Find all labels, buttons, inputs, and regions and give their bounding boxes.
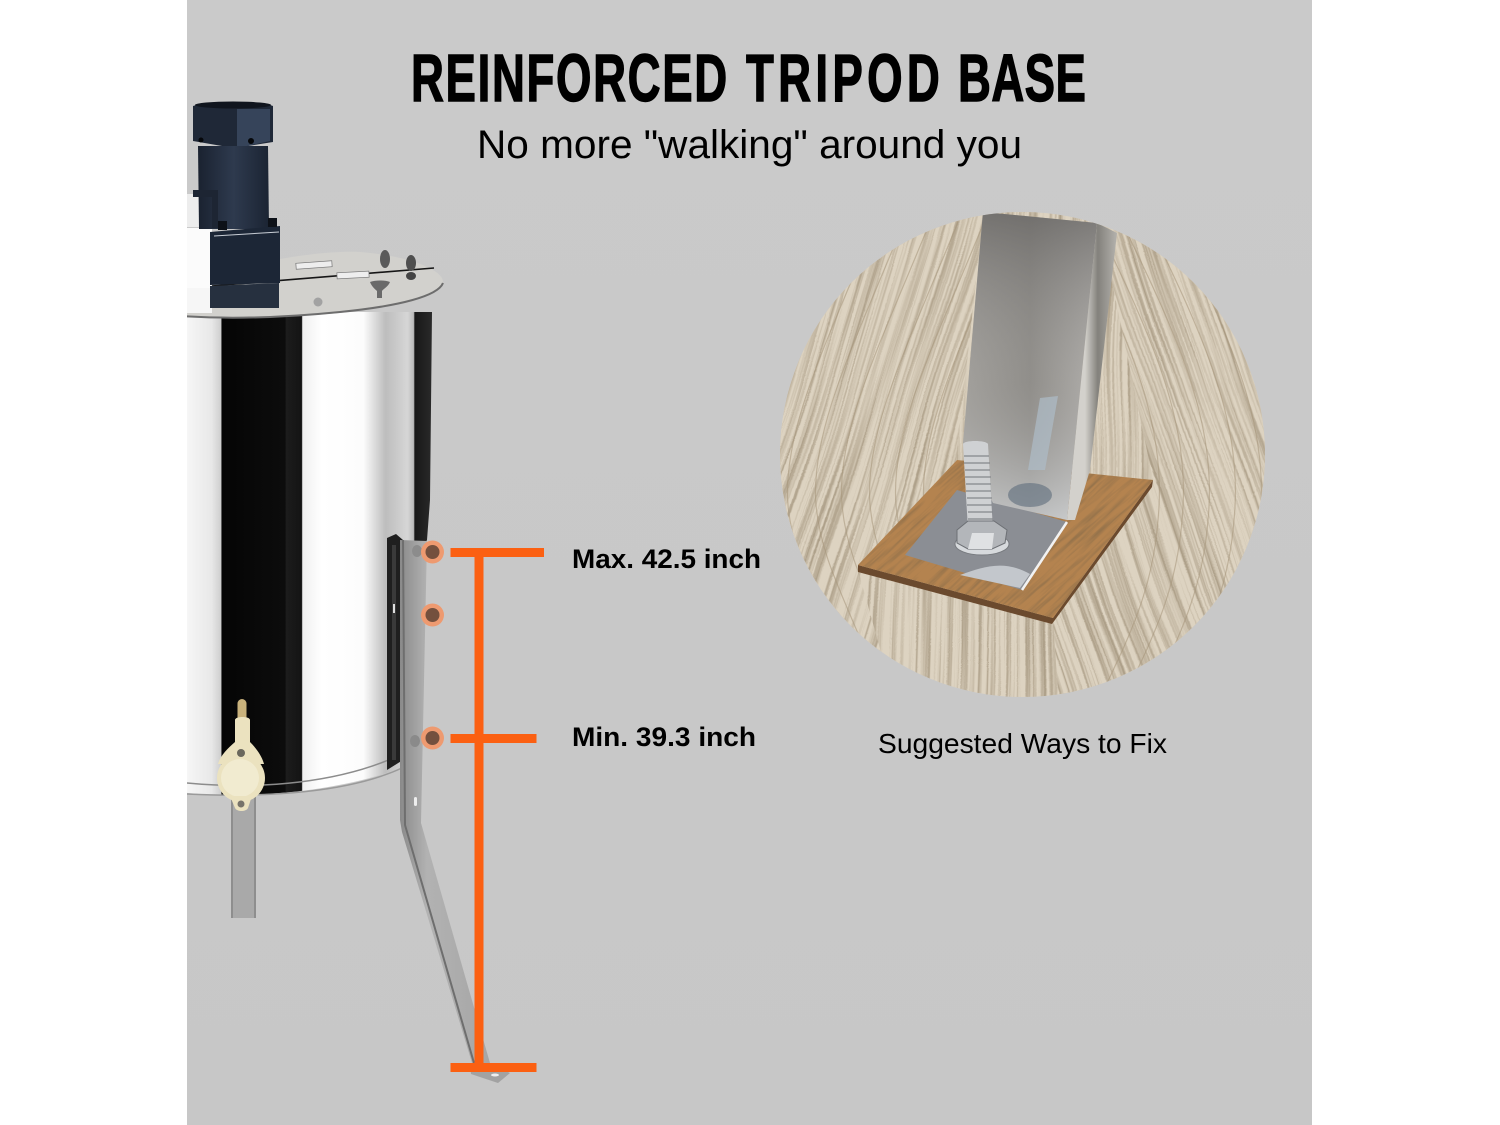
label: maximum height: Max. 42.5 inch <box>572 544 761 574</box>
caption: suggested ways to fix: Suggested Ways to Fix <box>878 728 1167 759</box>
height marker dots <box>421 540 444 750</box>
stainless drum body <box>180 312 432 795</box>
title: TRIPOD <box>746 41 940 116</box>
back leg <box>231 790 256 918</box>
honey gate tap <box>217 699 265 811</box>
bolt and nut <box>955 441 1009 555</box>
front tripod leg <box>387 534 510 1083</box>
transparent lid <box>180 250 443 318</box>
dot: upper hole <box>421 540 444 564</box>
title: BASE <box>958 41 1086 116</box>
title <box>411 41 1086 116</box>
dot: lower hole <box>421 726 444 750</box>
steel post <box>963 212 1117 520</box>
metal base plate <box>905 490 1067 590</box>
white gear box <box>187 194 212 313</box>
title: REINFORCED <box>411 41 727 116</box>
infographic canvas <box>187 0 1312 1125</box>
subtitle: No more "walking" around you <box>477 123 1022 167</box>
dot: middle hole <box>421 604 444 626</box>
motor <box>193 102 280 308</box>
circular detail photo: leg fixed to wood board <box>780 212 1265 697</box>
honey extractor product illustration <box>180 102 510 1083</box>
label: minimum height: Min. 39.3 inch <box>572 722 756 752</box>
gray background panel <box>187 0 1312 1125</box>
wood floor <box>780 212 1265 697</box>
left white margin <box>0 0 187 1125</box>
orange height dimension bracket <box>450 548 544 1072</box>
brown board <box>858 460 1153 624</box>
